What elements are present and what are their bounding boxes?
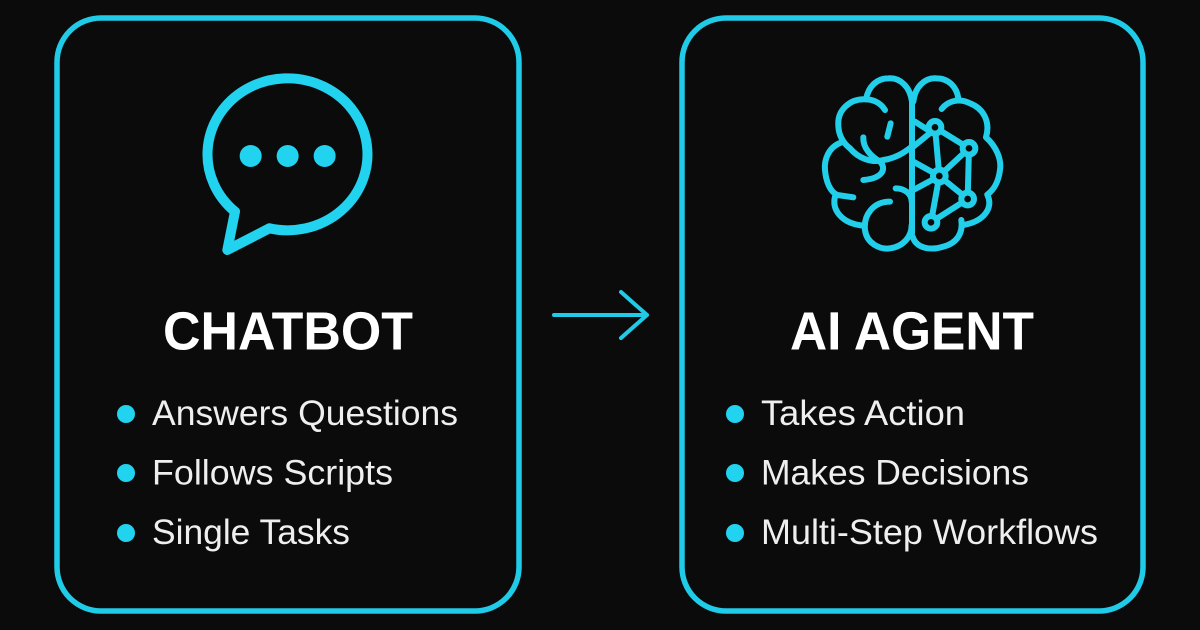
- list: ai agent features: Makes Decisions: [761, 454, 1029, 492]
- icon: brain network: [825, 78, 1000, 249]
- icon: chat bubble: [207, 78, 367, 250]
- list: ai agent features: [726, 394, 1098, 552]
- heading: ai agent: AI AGENT: [790, 302, 1034, 362]
- list: chatbot features: Follows Scripts: [152, 454, 393, 492]
- panel border: chatbot: [57, 18, 519, 611]
- panel border: ai agent: [682, 18, 1143, 611]
- list: ai agent features: Takes Action: [761, 394, 965, 433]
- list: ai agent features: Multi-Step Workflows: [761, 513, 1098, 552]
- panel: ai agent: [682, 18, 1143, 611]
- list: chatbot features: Single Tasks: [152, 513, 350, 552]
- list: chatbot features: [117, 394, 458, 552]
- heading: chatbot: CHATBOT: [163, 302, 413, 362]
- list: chatbot features: Answers Questions: [152, 394, 458, 433]
- arrow: [554, 292, 647, 338]
- panel: chatbot: [57, 18, 519, 611]
